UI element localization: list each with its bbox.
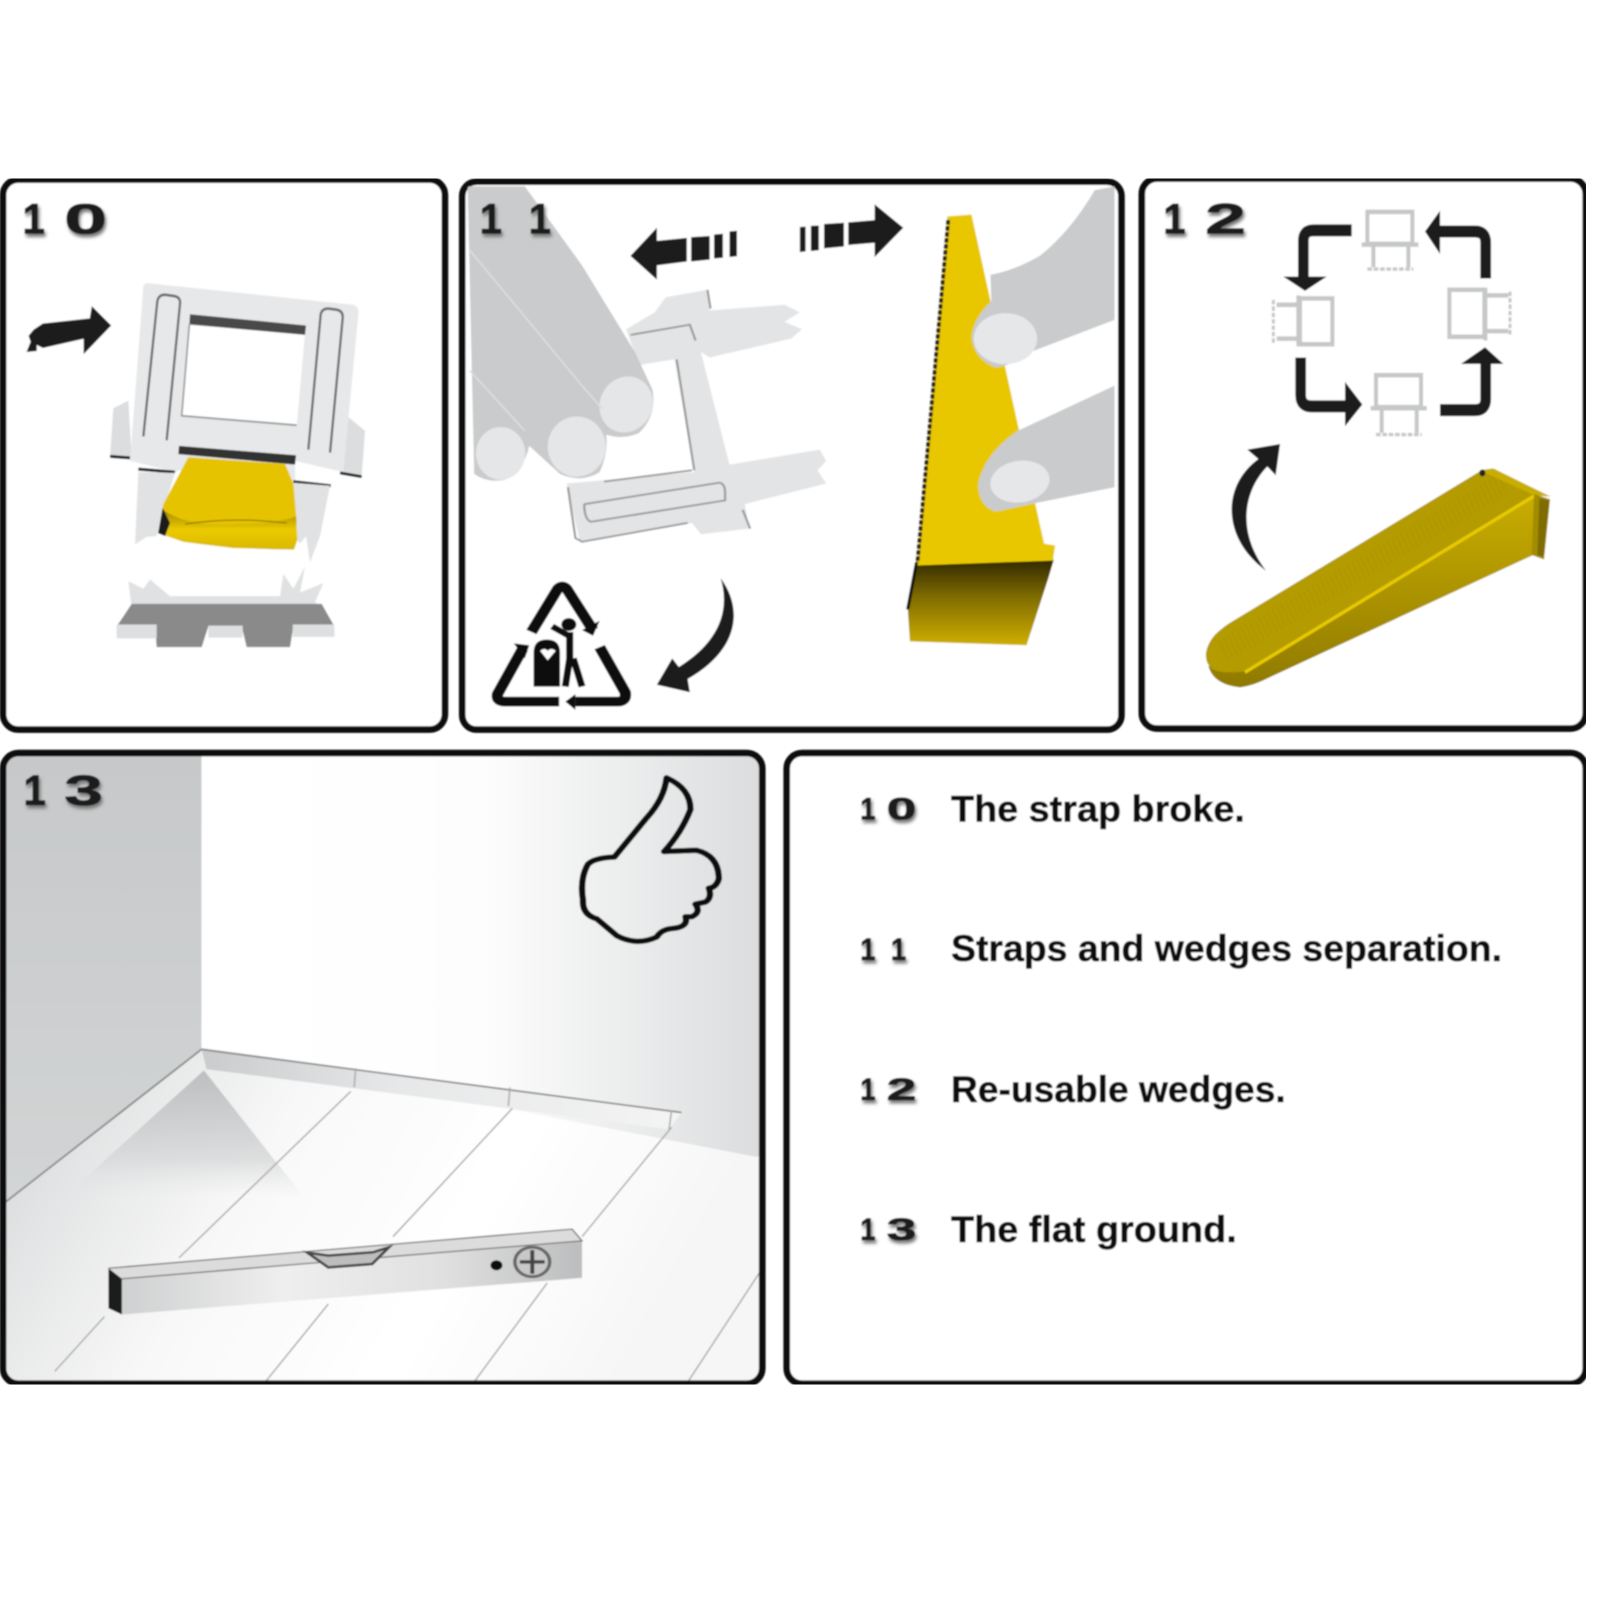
right hand nails <box>974 313 1055 508</box>
step number 11 <box>480 196 551 244</box>
thumbs up icon <box>582 778 719 941</box>
back wall <box>532 754 760 1157</box>
lower strap legs <box>135 472 330 562</box>
window edges <box>182 324 297 425</box>
finger nails <box>476 373 658 480</box>
arrow: right, dashed tail <box>800 204 903 257</box>
reflection on floor <box>100 1070 291 1184</box>
dark slot above wedge <box>178 446 296 465</box>
yellow wedge tip <box>158 457 297 549</box>
step number 11: 1 <box>529 196 551 244</box>
small strap left <box>1273 295 1332 346</box>
floor <box>0 1049 766 1384</box>
legend row 12: 1 <box>860 1071 876 1107</box>
left hand gripping strap <box>468 186 653 481</box>
window top shadow <box>189 314 306 335</box>
curved arrow to recycling symbol <box>657 578 734 692</box>
broken strap base <box>128 566 323 608</box>
legend row 11: 1 <box>891 931 906 967</box>
strap clip broken in two <box>110 283 365 647</box>
step number 10 <box>22 196 107 244</box>
step number 10: 1 <box>22 196 45 244</box>
legend row 12: Re-usable wedges. <box>951 1069 1286 1110</box>
skirting board <box>201 1048 682 1129</box>
right hand: lower finger <box>978 386 1115 512</box>
step number 13: 3 <box>64 767 103 815</box>
arrow: left, dashed tail <box>630 228 737 280</box>
step number 13: 1 <box>23 767 46 815</box>
left wall <box>0 753 201 1206</box>
panel: step 11, straps and wedges separation <box>462 182 1121 730</box>
legend row 13: 1 <box>860 1211 876 1247</box>
legend row 12: 2 <box>887 1071 916 1107</box>
step number 12 <box>1163 196 1246 244</box>
small strap bottom <box>1371 375 1427 435</box>
strap released by hand <box>567 290 826 542</box>
legend row 13: The flat ground. <box>951 1209 1237 1250</box>
tile joints <box>55 1091 761 1384</box>
big yellow wedge side view <box>908 215 1055 645</box>
step number 11: 1 <box>480 196 502 244</box>
small strap right <box>1449 288 1510 341</box>
spirit level <box>108 1229 582 1315</box>
legend row 10: 0 <box>887 790 916 826</box>
legend row 10: 1 <box>860 790 876 826</box>
panel: step 12, re-usable wedges <box>1142 179 1586 729</box>
right hand: upper finger <box>972 186 1115 368</box>
small strap top <box>1362 212 1418 269</box>
recycling triangle with person and bin <box>497 587 625 710</box>
step number 10: 0 <box>64 196 107 244</box>
legend row 11: Straps and wedges separation. <box>951 928 1502 969</box>
left and right slots <box>143 295 343 453</box>
arrow pointing at strap <box>27 306 111 354</box>
step number 12: 1 <box>1163 196 1186 244</box>
step number 12: 2 <box>1205 196 1246 244</box>
panel: legend text <box>787 753 1586 1384</box>
legend row 11: 1 <box>860 931 876 967</box>
strap frame <box>130 283 359 483</box>
black break lines <box>110 456 362 486</box>
curved arrow from wedge to cycle <box>1232 444 1280 571</box>
legend row 13: 3 <box>887 1211 916 1247</box>
panel: step 10, the strap broke <box>3 180 445 730</box>
step number 13 <box>23 767 103 815</box>
panel: step 13, the flat ground <box>0 753 766 1384</box>
reuse cycle arrows <box>1283 211 1503 426</box>
legend row 10: The strap broke. <box>951 788 1245 829</box>
yellow wedge <box>1206 468 1551 687</box>
side tabs <box>110 401 365 476</box>
